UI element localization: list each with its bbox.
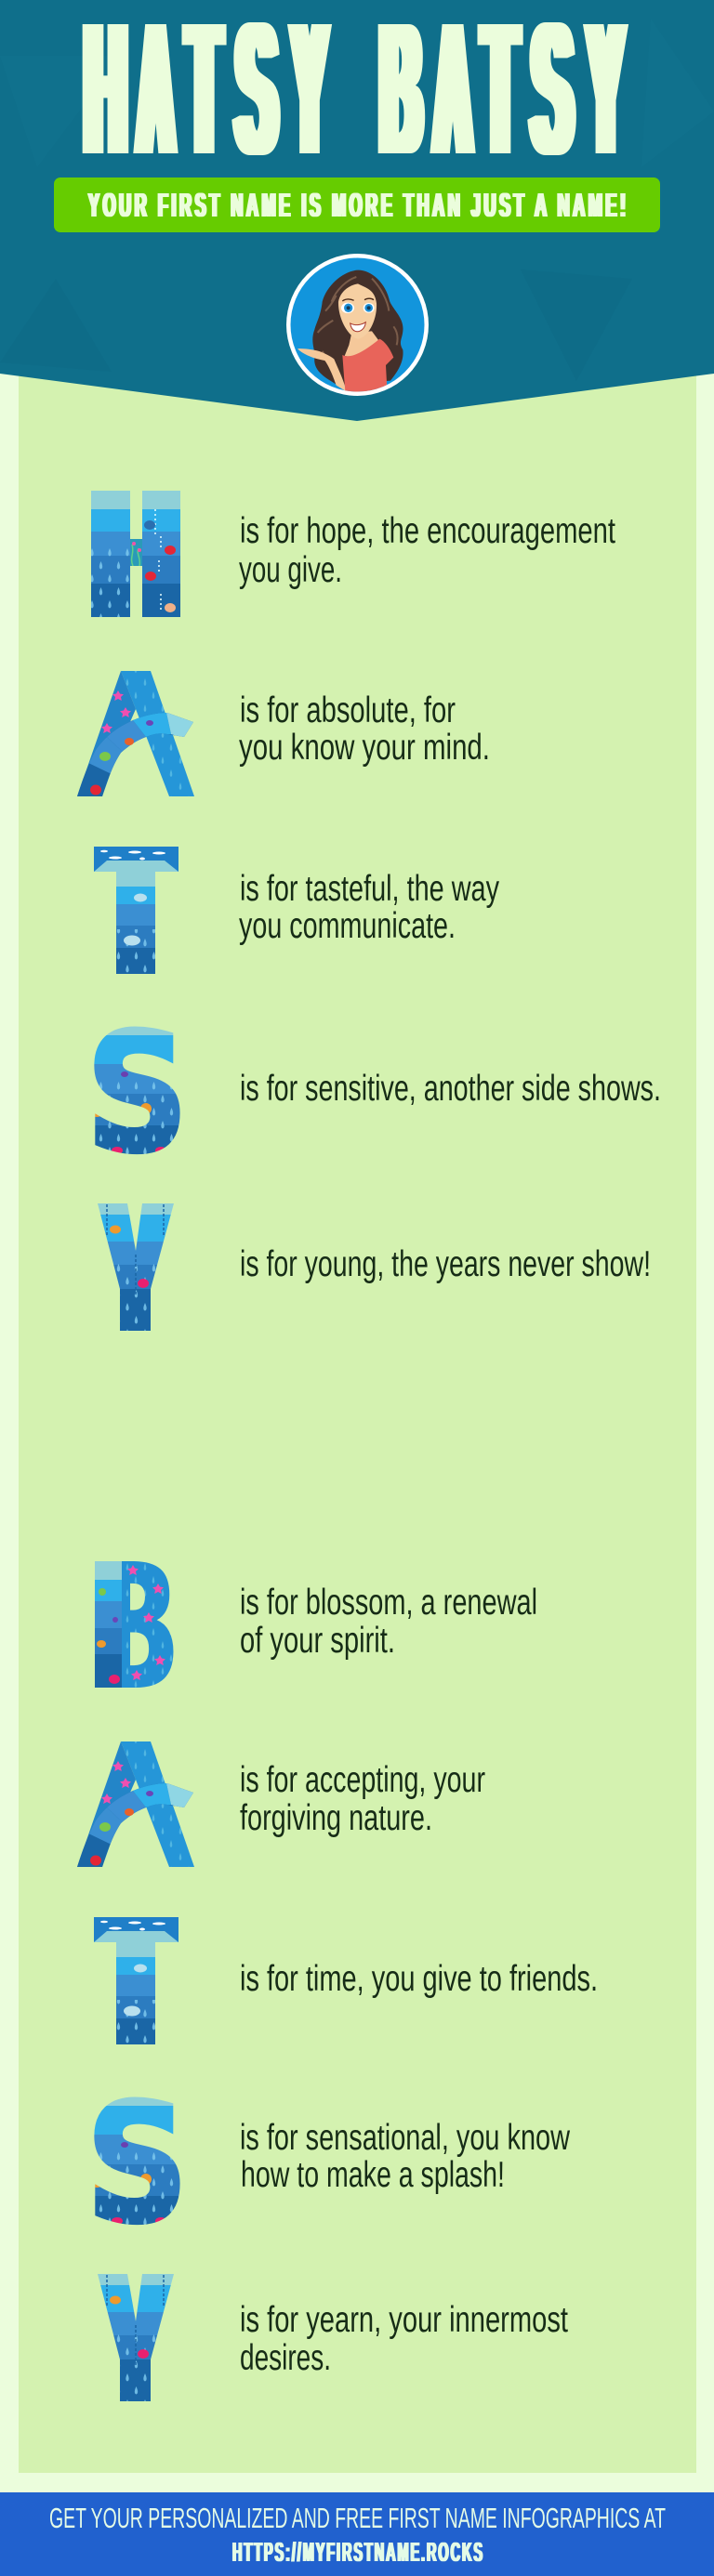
- text: A line: you know your mind.: [239, 728, 490, 768]
- icon: illustrated letter S: [94, 1026, 180, 1154]
- header banner: [0, 0, 714, 421]
- text: second S line: how to make a splash!: [241, 2155, 505, 2195]
- text: B line: [240, 1583, 537, 1661]
- text: second A line: forgiving nature.: [240, 1798, 432, 1838]
- title: [86, 0, 623, 194]
- text: T line: you communicate.: [239, 906, 456, 946]
- footer url: HTTPS://MYFIRSTNAME.ROCKS: [232, 2536, 483, 2567]
- icon: illustrated letter T: [94, 847, 178, 974]
- text: A line: [239, 690, 490, 768]
- icon: illustrated letter B: [95, 1561, 173, 1688]
- footer: [0, 2492, 714, 2576]
- text: second Y line: [240, 2300, 568, 2378]
- icon: second illustrated letter Y: [93, 2274, 177, 2401]
- icon: illustrated letter Y: [93, 1203, 177, 1331]
- text: A line: is for absolute, for: [240, 690, 456, 730]
- text: B line: is for blossom, a renewal: [240, 1583, 537, 1623]
- text: second S line: is for sensational, you know: [240, 2118, 570, 2158]
- portrait: cartoon woman in circle: [286, 254, 429, 396]
- text: second Y line: desires.: [240, 2338, 331, 2378]
- icon: illustrated letter A: [74, 671, 200, 799]
- text: second S line: [240, 2118, 570, 2195]
- icon: second illustrated letter A: [74, 1741, 200, 1870]
- text: T line: [239, 869, 500, 946]
- icon: illustrated letter H: [91, 491, 180, 617]
- text: second A line: [240, 1760, 485, 1838]
- text: H line: you give.: [239, 550, 342, 590]
- text: T line: is for tasteful, the way: [240, 869, 500, 909]
- text: second Y line: is for yearn, your innermost: [240, 2300, 568, 2340]
- icon: second illustrated letter S: [94, 2096, 180, 2225]
- text: B line: of your spirit.: [240, 1621, 395, 1661]
- icon: second illustrated letter T: [94, 1917, 178, 2044]
- text: second A line: is for accepting, your: [240, 1760, 485, 1800]
- text: second T line: is for time, you give to friends.: [240, 1959, 598, 1999]
- subtitle bar: [54, 177, 660, 232]
- subtitle bar: YOUR FIRST NAME IS MORE THAN JUST A NAME!: [88, 187, 626, 225]
- panel: letter list background: [19, 353, 696, 2473]
- text: H line: [239, 511, 615, 590]
